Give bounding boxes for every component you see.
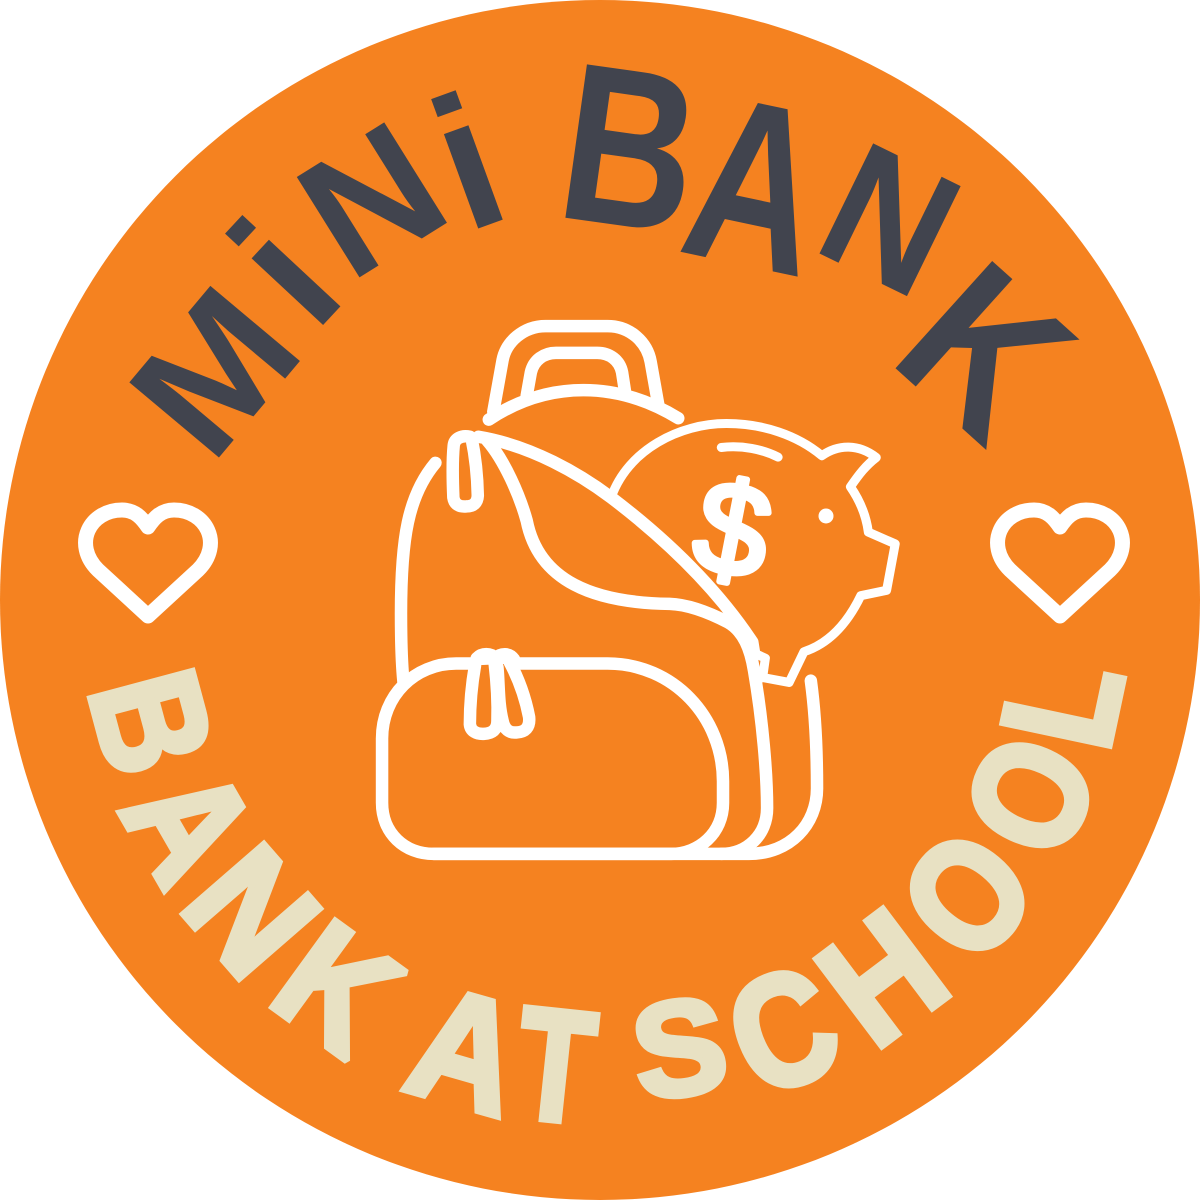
subtitle: BANK AT SCHOOL: N <box>152 815 352 1008</box>
piggy bank <box>611 424 895 682</box>
backpack body lines <box>401 437 817 854</box>
title: MiNi BANK: N <box>793 104 987 335</box>
subtitle: BANK AT SCHOOL: T <box>509 975 602 1158</box>
subtitle: BANK AT SCHOOL: O <box>929 711 1133 880</box>
icon: left heart <box>86 510 210 616</box>
subtitle: BANK AT SCHOOL: A <box>88 738 290 911</box>
icon: backpack with piggy bank <box>382 326 895 854</box>
title: MiNi BANK <box>94 15 1114 490</box>
backpack top arc <box>489 390 678 420</box>
title: MiNi BANK: i <box>407 54 529 272</box>
icon: right heart <box>998 510 1122 616</box>
title: MiNi BANK: B <box>546 15 713 282</box>
title: MiNi BANK: i <box>193 184 379 362</box>
title: MiNi BANK: K <box>856 219 1114 485</box>
subtitle: BANK AT SCHOOL <box>56 645 1158 1158</box>
subtitle: BANK AT SCHOOL: B <box>56 654 246 791</box>
backpack handles <box>493 326 659 412</box>
subtitle: BANK AT SCHOOL: K <box>245 888 431 1089</box>
top zipper puller <box>453 436 478 507</box>
subtitle: BANK AT SCHOOL: L <box>968 645 1158 762</box>
subtitle: BANK AT SCHOOL: S <box>623 967 736 1129</box>
title: MiNi BANK: M <box>94 253 336 490</box>
front pocket <box>382 664 723 854</box>
title: MiNi BANK: N <box>267 85 476 315</box>
subtitle: BANK AT SCHOOL: O <box>867 799 1069 993</box>
dollar sign: $ <box>683 450 782 608</box>
title: MiNi BANK: A <box>666 44 846 327</box>
subtitle: BANK AT SCHOOL: A <box>391 952 540 1150</box>
subtitle: BANK AT SCHOOL: H <box>788 876 976 1079</box>
piggy eye <box>818 508 834 524</box>
subtitle: BANK AT SCHOOL: C <box>705 931 862 1131</box>
pocket zipper pullers <box>470 654 529 734</box>
